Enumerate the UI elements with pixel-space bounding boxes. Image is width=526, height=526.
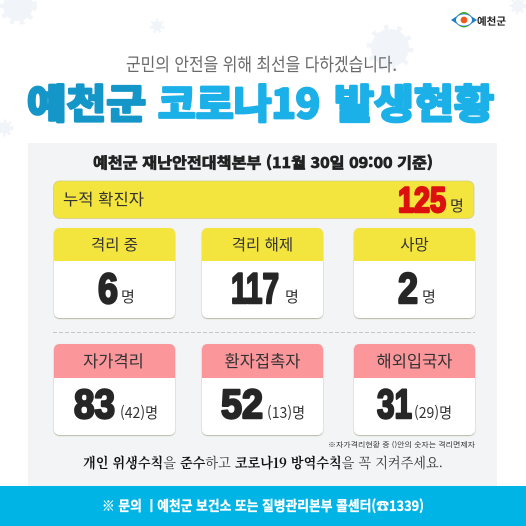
footer text: ※ 문의 ㅣ예천군 보건소 또는 질병관리본부 콜센터(☎1339) xyxy=(102,496,424,516)
footnote: ※자가격리현황 중 ()안의 숫자는 격리면제자 xyxy=(328,440,476,450)
card label: 격리 해제 xyxy=(232,233,293,255)
icon: county emblem xyxy=(451,12,477,28)
title xyxy=(27,72,494,130)
card unit: 명 xyxy=(285,286,299,307)
card: contacts xyxy=(202,344,323,435)
title: 발생현황 xyxy=(334,72,494,130)
card number: 2 xyxy=(398,265,418,313)
card unit: 명 xyxy=(121,286,135,307)
card label: 해외입국자 xyxy=(377,348,452,372)
cumulative confirmed bar xyxy=(54,181,474,220)
label: cumulative: 누적 확진자 xyxy=(63,186,144,210)
card unit: (13)명 xyxy=(267,402,305,423)
card unit: 명 xyxy=(422,286,436,307)
subtitle: 군민의 안전을 위해 최선을 다하겠습니다. xyxy=(126,51,397,77)
card label: 자가격리 xyxy=(83,348,144,372)
card number: 6 xyxy=(98,265,118,313)
title: 코로나19 xyxy=(158,72,320,130)
unit: 명 xyxy=(450,195,464,216)
logo xyxy=(451,12,506,28)
card: in quarantine xyxy=(54,228,175,318)
card: self quarantine xyxy=(54,344,175,435)
card: overseas arrivals xyxy=(354,344,475,435)
card number: 31 xyxy=(377,381,412,427)
footer bar xyxy=(0,486,526,526)
card number: 52 xyxy=(221,381,263,427)
card unit: (42)명 xyxy=(120,402,158,423)
card label: 사망 xyxy=(400,233,429,255)
card number: 83 xyxy=(74,381,115,427)
panel heading: 예천군 재난안전대책본부 (11월 30일 09:00 기준) xyxy=(93,152,433,173)
card unit: (29)명 xyxy=(414,402,452,423)
card: released xyxy=(202,228,323,318)
title: 예천군 xyxy=(27,72,146,130)
logo text: 예천군 xyxy=(477,13,506,28)
background virus decorations xyxy=(0,0,524,134)
card: deaths xyxy=(354,228,475,318)
panel: status xyxy=(28,143,497,486)
card label: 환자접촉자 xyxy=(225,348,300,372)
number: 125: 125 xyxy=(398,181,446,220)
card number: 117 xyxy=(231,265,279,313)
hygiene notice: 개인 위생수칙을 준수하고 코로나19 방역수칙을 꼭 지켜주세요. xyxy=(83,453,443,473)
card label: 격리 중 xyxy=(91,233,138,255)
